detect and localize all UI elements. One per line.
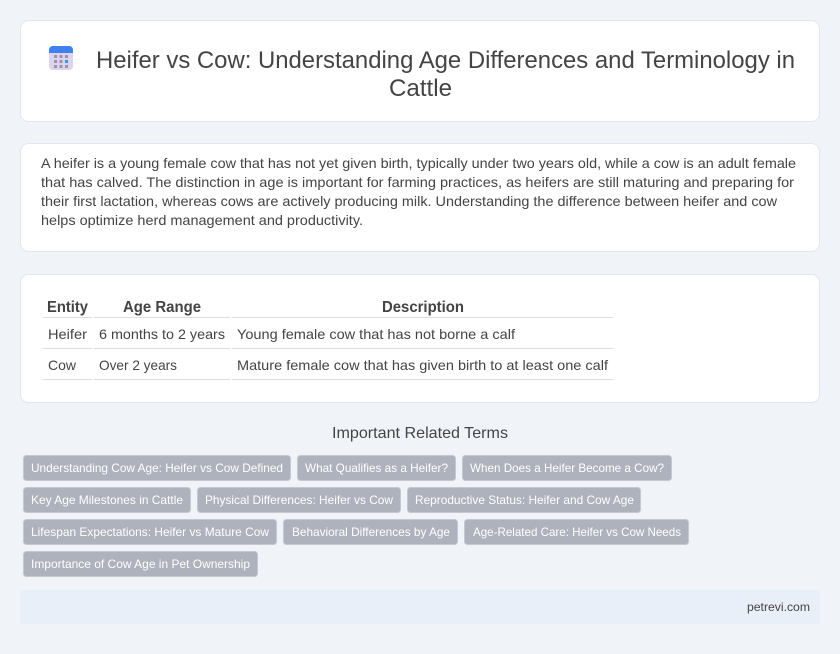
tag: Importance of Cow Age in Pet Ownership (31, 557, 250, 571)
table header: Age Range (123, 299, 201, 316)
title (96, 47, 795, 102)
table row: heifer: Heifer (48, 326, 87, 342)
tag: Physical Differences: Heifer vs Cow (205, 493, 393, 507)
text block: introduction paragraph: helps optimize herd management and productivity. (41, 212, 363, 228)
footer (20, 590, 820, 624)
table header (43, 299, 613, 318)
tag (24, 552, 258, 576)
footer source text: petrevi.com (747, 600, 810, 614)
tag (24, 456, 290, 480)
tag: Behavioral Differences by Age (292, 525, 450, 539)
title: Cattle (389, 75, 452, 102)
tag: Reproductive Status: Heifer and Cow Age (415, 493, 634, 507)
table row: cow: Mature female cow that has given birth to at least one calf (237, 357, 608, 373)
table header: Description (382, 299, 464, 316)
text block: introduction paragraph: that has calved. The distinction in age is important for farming practices, as heifers are still maturing and preparing for (41, 174, 794, 190)
table row: heifer: Young female cow that has not borne a calf (237, 326, 515, 342)
tag (24, 520, 276, 544)
tag (462, 456, 672, 480)
table row: heifer: 6 months to 2 years (99, 326, 225, 342)
table row: cow: Cow (48, 357, 77, 373)
tag: Age-Related Care: Heifer vs Cow Needs (473, 525, 681, 539)
text block: introduction paragraph: their first lactation, whereas cows are actively producing milk. Understanding the difference between heifer and cow (41, 193, 778, 209)
heading: important related terms: Important Related Terms (332, 425, 508, 442)
panel: age table (20, 274, 820, 402)
tag: Key Age Milestones in Cattle (31, 493, 183, 507)
icon: calendar (49, 46, 73, 70)
title: Heifer vs Cow: Understanding Age Differences and Terminology in (96, 47, 795, 74)
table row: heifer (43, 326, 613, 349)
text block: introduction paragraph (41, 155, 796, 228)
text block: introduction paragraph: A heifer is a young female cow that has not yet given birth, typically under two years old, while a cow is an adult female (41, 155, 796, 171)
panel: introduction (20, 144, 820, 252)
tag: When Does a Heifer Become a Cow? (470, 461, 664, 475)
tag (24, 488, 190, 512)
tag: What Qualifies as a Heifer? (305, 461, 448, 475)
tag (284, 520, 458, 544)
tag: Understanding Cow Age: Heifer vs Cow Defined (31, 461, 283, 475)
tag: Lifespan Expectations: Heifer vs Mature Cow (31, 525, 269, 539)
tag (464, 520, 688, 544)
tag list: related terms (24, 456, 688, 576)
table header: Entity (47, 299, 88, 316)
tag (198, 488, 400, 512)
tag (298, 456, 456, 480)
table row: cow (43, 357, 613, 380)
tag (408, 488, 640, 512)
table row: cow: Over 2 years (99, 357, 177, 373)
panel: header (20, 20, 820, 122)
